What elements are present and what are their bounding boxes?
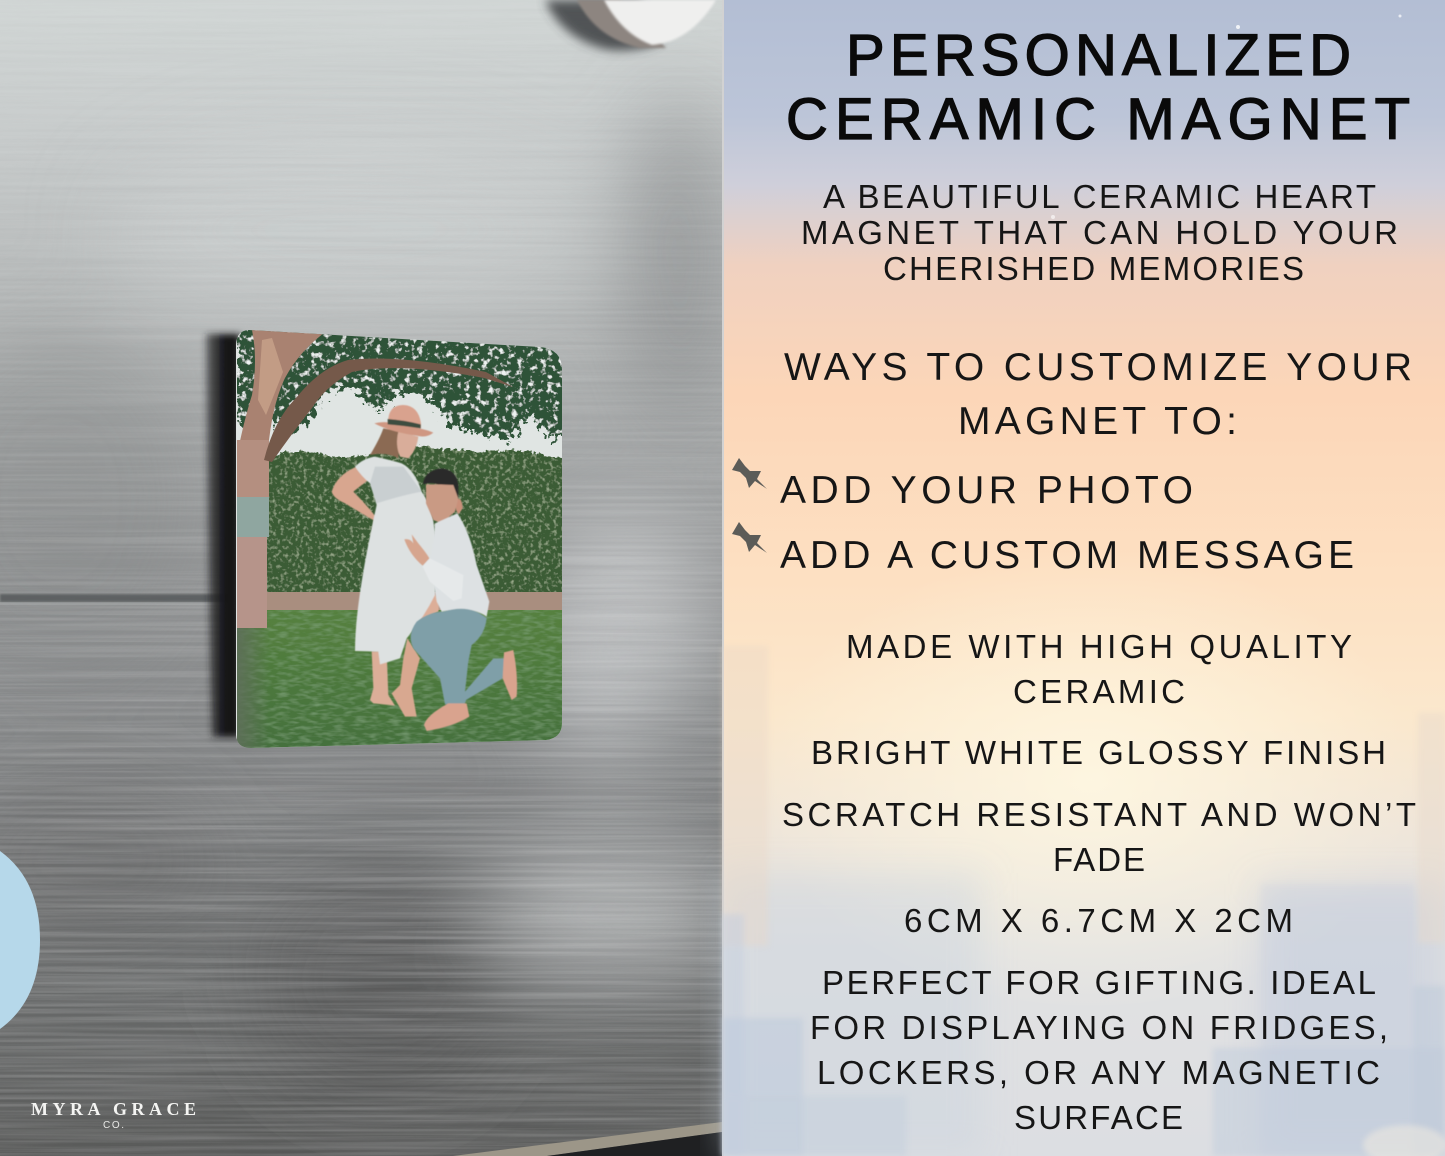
tree trunk — [240, 330, 322, 440]
heading: ways to customize — [784, 346, 1412, 443]
text: product features: SURFACE — [1014, 1099, 1183, 1136]
text: add a custom message: ADD A CUSTOM MESSAGE — [780, 534, 1354, 577]
panel: brushed metal fridge photo — [0, 0, 730, 1156]
text: product features: FOR DISPLAYING ON FRIDGES, — [810, 1009, 1388, 1046]
title: CERAMIC MAGNET — [786, 87, 1410, 152]
icon: push pin — [732, 458, 767, 489]
text: subtitle: CHERISHED MEMORIES — [883, 250, 1304, 287]
tree branch — [264, 358, 513, 462]
text: product features: CERAMIC — [1013, 673, 1185, 710]
text: subtitle: MAGNET THAT CAN HOLD YOUR — [801, 214, 1398, 251]
heading: ways to customize: WAYS TO CUSTOMIZE YOUR — [784, 346, 1412, 389]
text: brand logo: CO. — [103, 1120, 124, 1131]
text: subtitle — [801, 178, 1398, 287]
text: product features — [782, 628, 1416, 1136]
magnet gloss edge — [236, 339, 237, 740]
foliage — [236, 320, 575, 440]
panel: sunset background — [722, 0, 1445, 1156]
hedge — [265, 446, 570, 600]
grass — [236, 610, 562, 750]
text: product features: LOCKERS, OR ANY MAGNETIC — [817, 1054, 1380, 1091]
city silhouettes — [722, 873, 1445, 1156]
text: product features: MADE WITH HIGH QUALITY — [846, 628, 1352, 665]
heading: ways to customize: MAGNET TO: — [958, 400, 1237, 443]
woman — [332, 405, 439, 717]
icon: blue round magnet — [0, 851, 40, 1029]
text: product features: BRIGHT WHITE GLOSSY FINISH — [811, 734, 1386, 771]
list: customization options — [732, 458, 1354, 577]
text: brand logo — [31, 1099, 196, 1131]
man — [404, 468, 517, 731]
title — [786, 23, 1410, 152]
icon: push pin — [732, 522, 767, 553]
title: PERSONALIZED — [846, 23, 1351, 88]
text: product features: PERFECT FOR GIFTING. IDEAL — [822, 964, 1376, 1001]
fridge bottom edge — [453, 1122, 722, 1156]
garden wall — [267, 592, 562, 610]
text: product features: 6CM X 6.7CM X 2CM — [904, 902, 1293, 939]
magnet shadow — [206, 334, 240, 737]
text: add your photo: ADD YOUR PHOTO — [780, 469, 1193, 512]
text: product features: SCRATCH RESISTANT AND WON’T — [782, 796, 1416, 833]
text: subtitle: A BEAUTIFUL CERAMIC HEART — [823, 178, 1376, 215]
text: brand logo: MYRA GRACE — [31, 1099, 196, 1119]
icon: white round magnet — [545, 0, 716, 50]
text: product features: FADE — [1053, 841, 1145, 878]
photo magnet — [236, 320, 575, 750]
